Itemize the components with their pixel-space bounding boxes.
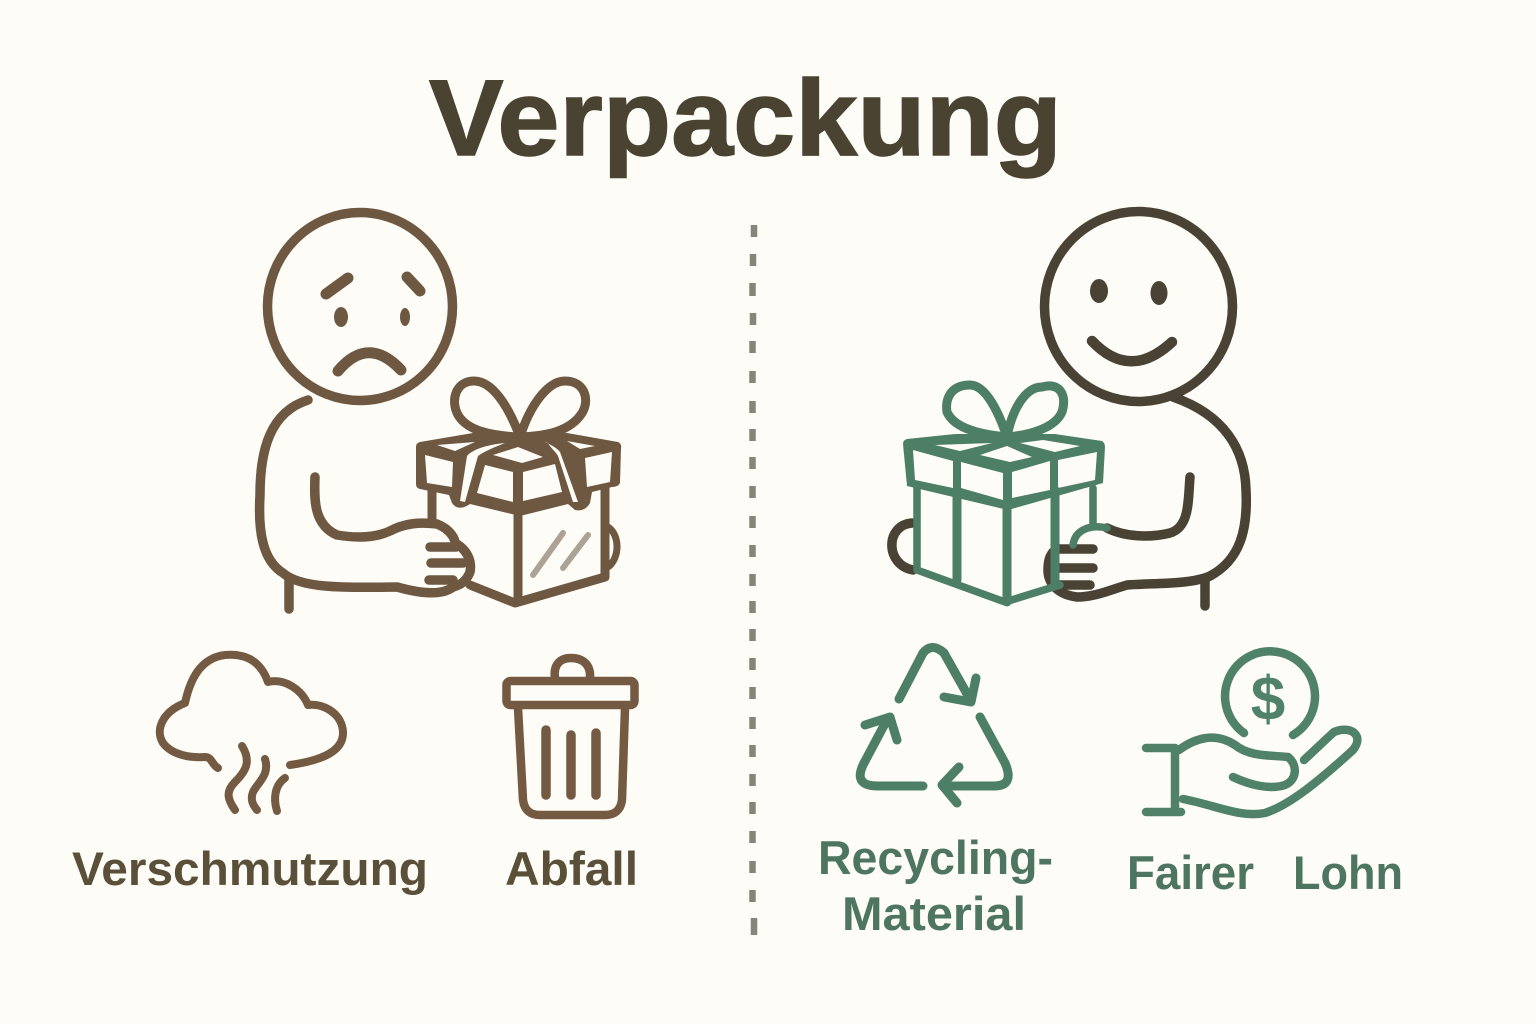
box body (917, 488, 1107, 602)
label: Recycling-Material: Material (842, 887, 1026, 940)
body (1048, 397, 1246, 597)
gift box: worn packaging (416, 381, 621, 603)
leg stub (1200, 580, 1210, 606)
gift box: sustainable packaging (903, 385, 1107, 602)
label: Abfall: Abfall (505, 842, 638, 895)
lid silhouette (416, 433, 621, 516)
dollar sign: $ (1251, 665, 1285, 734)
box body (432, 488, 605, 603)
head (268, 212, 452, 400)
icon: recycling arrows (860, 648, 1008, 803)
reflection (533, 533, 588, 575)
arm (1107, 477, 1190, 536)
hand (1146, 730, 1357, 814)
fingers (429, 547, 463, 580)
lid openings (425, 441, 612, 502)
back hand (608, 527, 617, 567)
happy person (892, 212, 1246, 606)
panel: positive packaging (892, 212, 1246, 606)
sad person holding gift (260, 212, 617, 609)
label: Recycling-Material (818, 831, 1053, 940)
coin (1225, 651, 1315, 735)
label: Fairer Lohn: Fairer (1127, 846, 1254, 899)
sad face (326, 277, 420, 371)
arm and hand (315, 477, 470, 587)
bow (455, 381, 586, 437)
bow (947, 385, 1064, 437)
divider: dashed vertical line (752, 225, 754, 935)
leg stub (284, 578, 294, 609)
fingers (1058, 549, 1093, 585)
icon: trash can (506, 658, 634, 815)
label: Fairer Lohn: Lohn (1293, 846, 1403, 899)
back hand (892, 523, 913, 570)
title: Verpackung (429, 57, 1062, 178)
lid silhouette (903, 434, 1105, 510)
icon: pollution cloud (160, 655, 343, 811)
label: Verschmutzung: Verschmutzung (72, 842, 428, 895)
happy face (1090, 279, 1172, 361)
vertical ribbons and edges (957, 490, 1055, 602)
label: Fairer Lohn (1127, 846, 1403, 899)
label: Recycling-Material: Recycling- (818, 831, 1053, 884)
icon: coin in hand (1146, 651, 1357, 814)
body (260, 400, 453, 593)
head (1044, 212, 1232, 402)
lid openings (913, 440, 1097, 500)
panel: negative packaging (260, 212, 621, 609)
